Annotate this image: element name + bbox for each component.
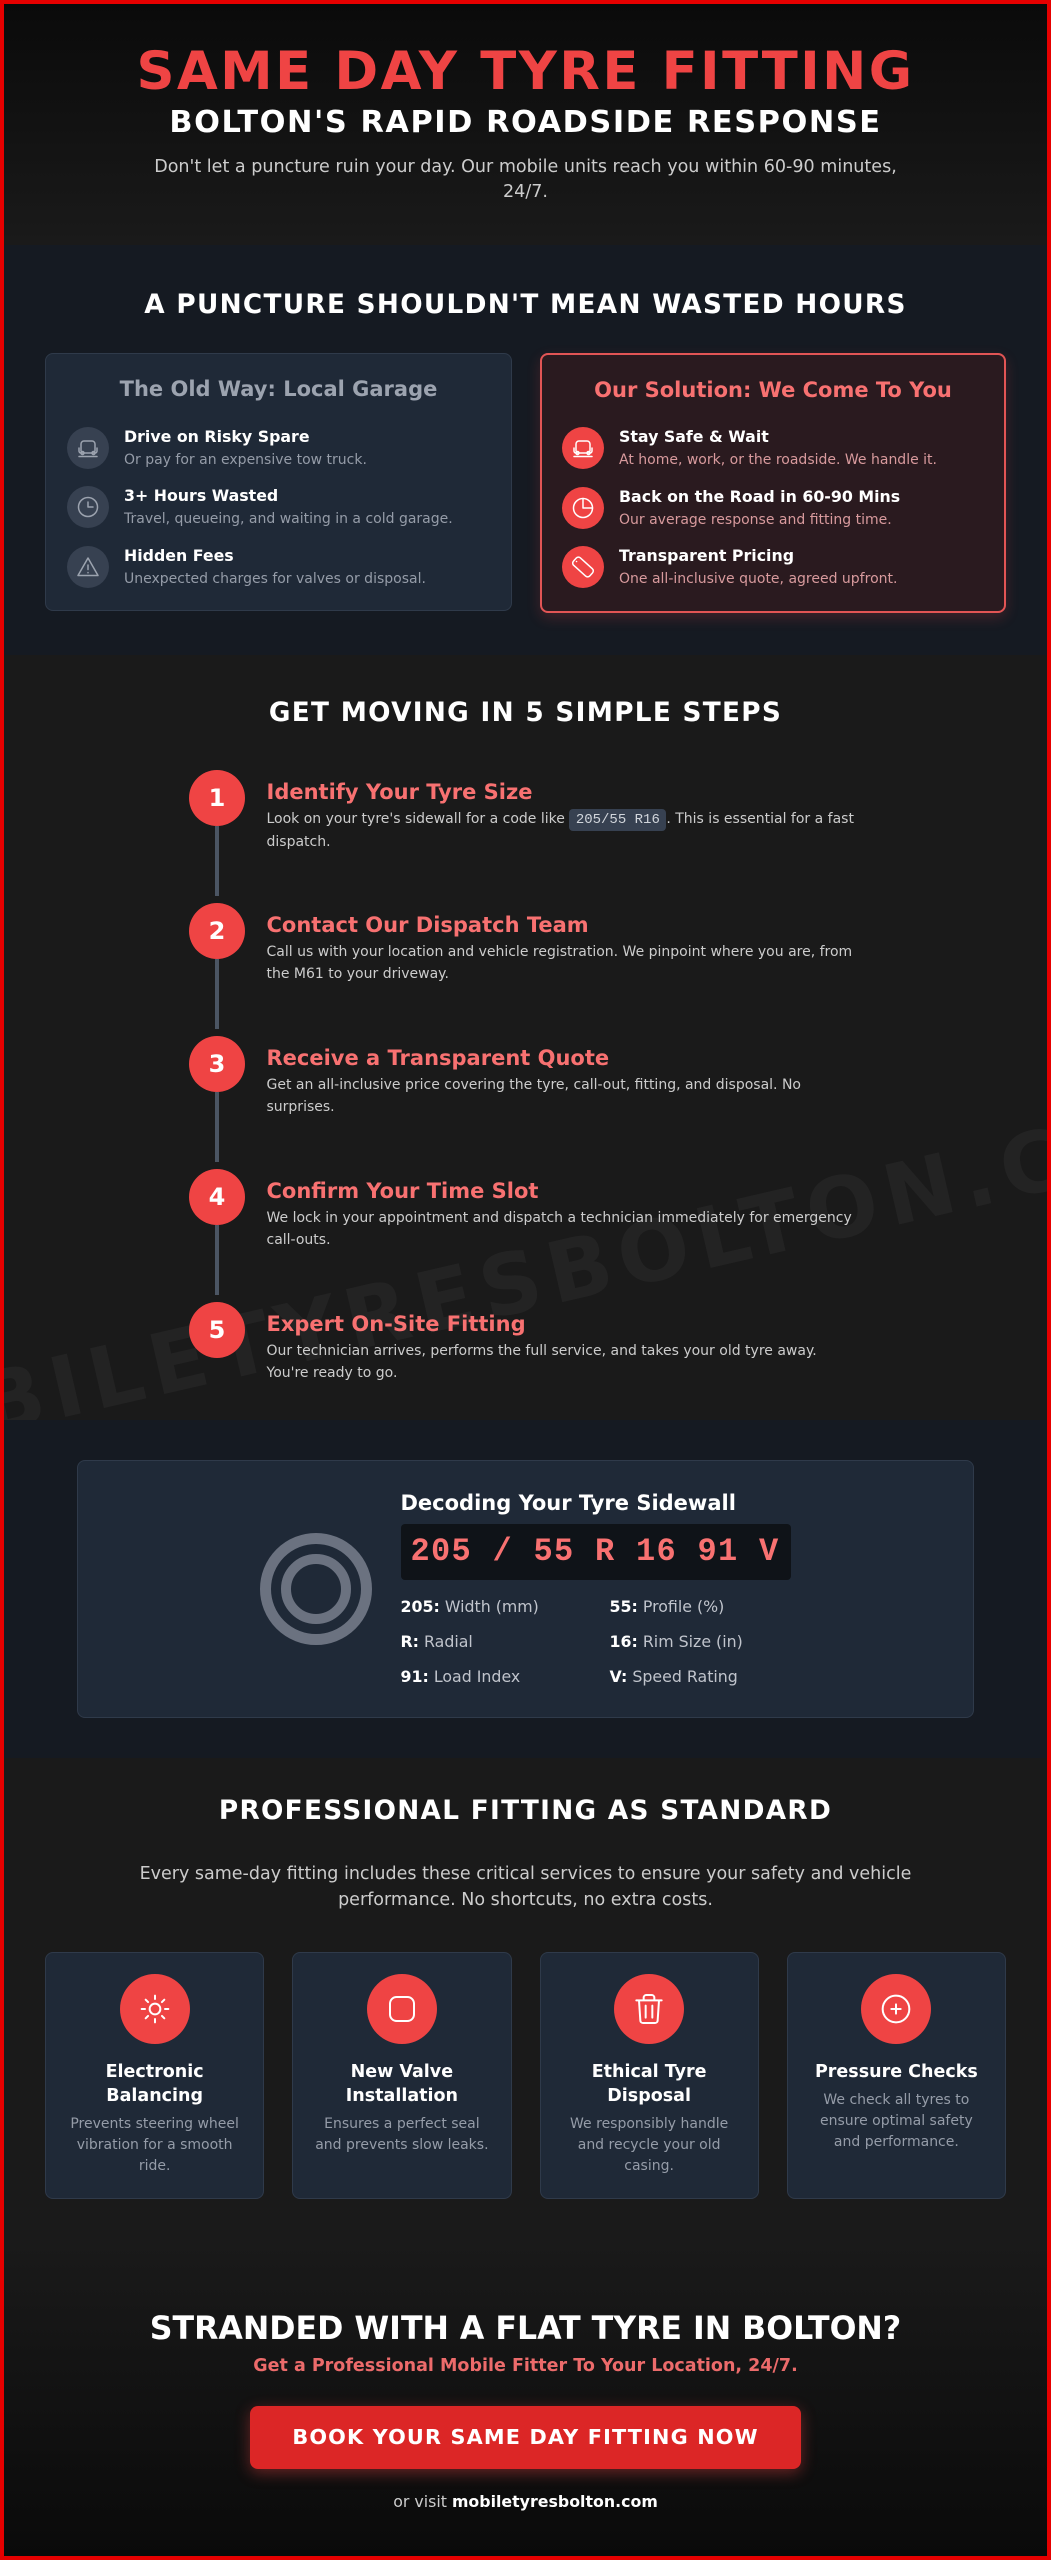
item title: Back on the Road in 60-90 Mins — [619, 487, 900, 506]
button: BOOK YOUR SAME DAY FITTING NOW — [292, 2425, 759, 2449]
card text: and recycle your old — [578, 2137, 720, 2153]
card text — [315, 2116, 489, 2153]
step 4 — [189, 1169, 852, 1295]
item title: Hidden Fees — [124, 546, 234, 565]
step description: the M61 to your driveway. — [266, 966, 449, 982]
card title: Installation — [346, 2086, 458, 2106]
services section — [0, 1758, 1051, 2240]
step description: You're ready to go. — [266, 1364, 397, 1380]
step title: Receive a Transparent Quote — [266, 1046, 609, 1070]
card title: New Valve — [351, 2062, 453, 2082]
card title: Disposal — [607, 2086, 691, 2106]
tyre decoding section — [0, 1420, 1051, 1758]
section heading: GET MOVING IN 5 SIMPLE STEPS — [269, 698, 782, 728]
step number: 4 — [209, 1183, 225, 1211]
step description: Get an all-inclusive price covering the tyre, call-out, fitting, and disposal. No — [266, 1077, 801, 1093]
item description: Travel, queueing, and waiting in a cold garage. — [124, 511, 453, 527]
rim size: 16: Rim Size (in) — [610, 1632, 743, 1651]
card text: Ensures a perfect seal — [324, 2116, 480, 2132]
problem section — [0, 245, 1051, 655]
connector line — [215, 959, 219, 1029]
card text: vibration for a smooth — [77, 2137, 233, 2153]
cta subheading: Get a Professional Mobile Fitter To Your Location, 24/7. — [253, 2356, 798, 2376]
icon: car — [67, 427, 109, 469]
code legend — [400, 1597, 743, 1686]
card title — [592, 2062, 707, 2106]
section intro — [140, 1864, 911, 1910]
step description: dispatch. — [266, 834, 331, 850]
step number: 1 — [209, 784, 225, 812]
card title: Balancing — [106, 2086, 203, 2106]
item description: Our average response and fitting time. — [619, 512, 892, 528]
step number: 2 — [209, 917, 225, 945]
width: 205: Width (mm) — [400, 1597, 539, 1616]
step description: call-outs. — [266, 1232, 331, 1248]
step description: Look on your tyre's sidewall for a code like 205/55 R16 . This is essential for a fast — [266, 811, 854, 828]
step number — [189, 903, 245, 959]
card text: ensure optimal safety — [820, 2113, 973, 2129]
step number: 3 — [209, 1050, 225, 1078]
card title: Pressure Checks — [815, 2062, 978, 2082]
section intro: Every same-day fitting includes these critical services to ensure your safety and vehicle — [140, 1864, 911, 1884]
card text: We responsibly handle — [570, 2116, 728, 2132]
title: SAME DAY TYRE FITTING — [136, 41, 914, 102]
icon: plus circle — [861, 1974, 931, 2044]
item description: Or pay for an expensive tow truck. — [124, 452, 367, 468]
step number — [189, 1036, 245, 1092]
speed rating: V: Speed Rating — [610, 1667, 738, 1686]
icon: tyre rings — [260, 1533, 372, 1645]
item title: Transparent Pricing — [619, 546, 794, 565]
step number: 5 — [209, 1316, 225, 1344]
item description: Unexpected charges for valves or disposal. — [124, 571, 426, 587]
panel: the old way — [45, 353, 512, 611]
step title: Identify Your Tyre Size — [266, 780, 532, 804]
step description — [266, 944, 852, 982]
connector line — [215, 1225, 219, 1295]
intro text: 24/7. — [503, 182, 548, 202]
card text — [820, 2092, 973, 2150]
icon: sun wheel — [120, 1974, 190, 2044]
card text: We check all tyres to — [823, 2092, 969, 2108]
card text — [70, 2116, 239, 2174]
icon: pie timer — [562, 487, 604, 529]
step 1 — [189, 770, 854, 896]
section heading: A PUNCTURE SHOULDN'T MEAN WASTED HOURS — [144, 290, 907, 320]
website line: or visit mobiletyresbolton.com — [393, 2492, 658, 2511]
card text: and prevents slow leaks. — [315, 2137, 489, 2153]
item title: Drive on Risky Spare — [124, 427, 310, 446]
step description — [266, 1343, 817, 1380]
panel heading: The Old Way: Local Garage — [120, 377, 437, 401]
step title: Contact Our Dispatch Team — [266, 913, 589, 937]
button — [250, 2406, 801, 2469]
step description: Call us with your location and vehicle registration. We pinpoint where you are, from — [266, 944, 852, 960]
icon: car — [562, 427, 604, 469]
icon: warning triangle — [67, 546, 109, 588]
icon: rounded square — [367, 1974, 437, 2044]
item title: 3+ Hours Wasted — [124, 486, 278, 505]
service card: balancing — [45, 1952, 264, 2199]
load index: 91: Load Index — [400, 1667, 520, 1686]
panel heading: Decoding Your Tyre Sidewall — [400, 1491, 736, 1515]
connector line — [215, 826, 219, 896]
panel: sidewall decoder — [77, 1460, 974, 1718]
step description — [266, 1077, 801, 1114]
intro text — [154, 157, 897, 202]
step description — [266, 1210, 852, 1248]
panel: our solution — [540, 353, 1006, 613]
step description — [266, 809, 854, 850]
item description: At home, work, or the roadside. We handle it. — [619, 452, 937, 468]
card text: Prevents steering wheel — [70, 2116, 239, 2132]
card text: and performance. — [834, 2134, 959, 2150]
service card: pressure — [787, 1952, 1006, 2199]
step 3 — [189, 1036, 801, 1162]
step description: Our technician arrives, performs the full service, and takes your old tyre away. — [266, 1343, 817, 1359]
step 2 — [189, 903, 852, 1029]
card text: ride. — [139, 2158, 170, 2174]
step 5 — [189, 1302, 817, 1380]
intro text: Don't let a puncture ruin your day. Our mobile units reach you within 60-90 minutes, — [154, 157, 897, 177]
step description: We lock in your appointment and dispatch a technician immediately for emergency — [266, 1210, 852, 1226]
icon: bin — [614, 1974, 684, 2044]
tyre code — [400, 1524, 790, 1580]
step title: Expert On-Site Fitting — [266, 1312, 526, 1336]
call to action section — [0, 2240, 1051, 2560]
service card: disposal — [540, 1952, 759, 2199]
card title: Ethical Tyre — [592, 2062, 707, 2082]
step number — [189, 1302, 245, 1358]
tyre code: 205 / 55 R 16 91 V — [410, 1533, 780, 1570]
service card: valve — [292, 1952, 512, 2199]
subtitle: BOLTON'S RAPID ROADSIDE RESPONSE — [169, 105, 882, 140]
section heading: PROFESSIONAL FITTING AS STANDARD — [219, 1796, 832, 1826]
panel heading: Our Solution: We Come To You — [594, 378, 952, 402]
connector line — [215, 1092, 219, 1162]
step title: Confirm Your Time Slot — [266, 1179, 538, 1203]
step description: surprises. — [266, 1098, 335, 1114]
card title — [106, 2062, 204, 2106]
icon: price tag — [562, 546, 604, 588]
profile: 55: Profile (%) — [610, 1597, 724, 1616]
card title: Electronic — [106, 2062, 204, 2082]
icon: clock — [67, 486, 109, 528]
item description: One all-inclusive quote, agreed upfront. — [619, 571, 897, 587]
steps section — [0, 655, 1051, 1420]
card text — [570, 2116, 728, 2174]
step number — [189, 1169, 245, 1225]
radial: R: Radial — [400, 1632, 473, 1651]
header section — [0, 0, 1051, 245]
item title: Stay Safe & Wait — [619, 427, 769, 446]
card text: casing. — [624, 2158, 674, 2174]
card title — [346, 2062, 458, 2106]
step number — [189, 770, 245, 826]
section intro: performance. No shortcuts, no extra costs. — [338, 1890, 713, 1910]
cta heading: STRANDED WITH A FLAT TYRE IN BOLTON? — [150, 2310, 901, 2346]
